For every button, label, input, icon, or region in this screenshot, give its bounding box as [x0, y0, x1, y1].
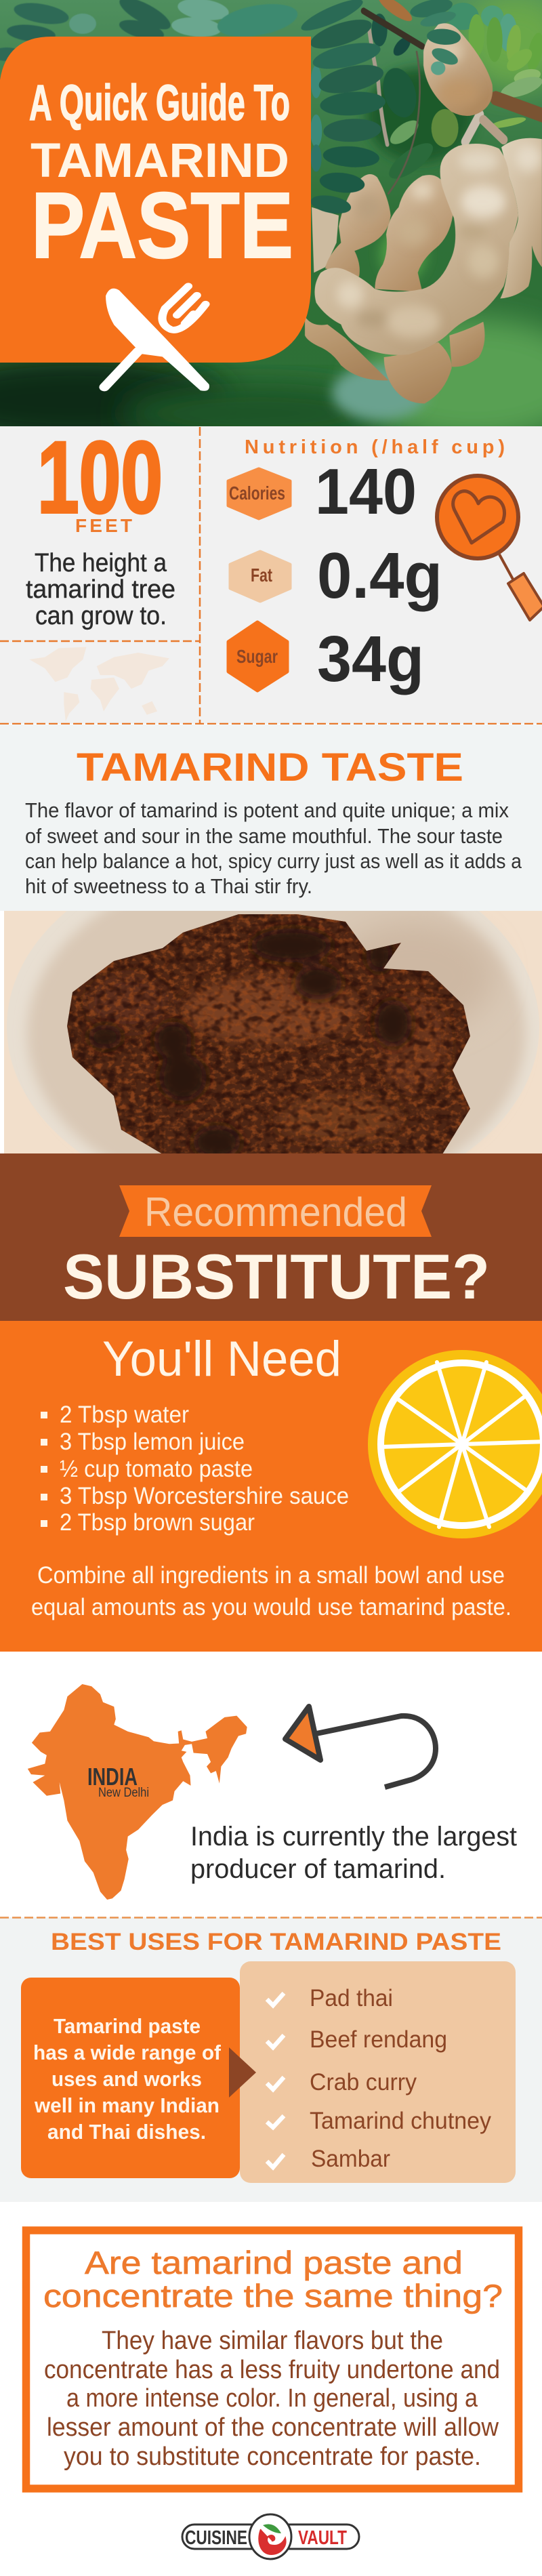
bright leaves — [371, 0, 542, 185]
heading: SUBSTITUTE? — [63, 1241, 490, 1312]
body text: you to substitute concentrate for paste. — [64, 2442, 481, 2471]
stat: 100 feet: FEET — [75, 515, 132, 536]
body text: They have similar flavors but the — [102, 2327, 443, 2355]
ingredient list: 2 Tbsp water — [60, 1402, 189, 1428]
description box: uses and works — [51, 2067, 202, 2091]
heading: BEST USES FOR TAMARIND PASTE — [51, 1929, 501, 1955]
description box: Tamarind paste — [54, 2014, 201, 2038]
stat: 100 feet: 100 — [37, 420, 163, 534]
heading: You'll Need — [102, 1332, 341, 1387]
stat: calories: Calories — [229, 483, 285, 504]
title line 2: TAMARIND — [30, 134, 289, 188]
stat: fat: 0.4g — [317, 539, 442, 612]
icon: lemon slice — [368, 1350, 542, 1538]
panel: stats background — [0, 426, 542, 724]
body text: concentrate has a less fruity undertone and — [44, 2356, 500, 2384]
heading: concentrate the same thing? — [43, 2278, 503, 2314]
heading — [43, 2245, 503, 2314]
ingredient list: 3 Tbsp Worcestershire sauce — [60, 1483, 349, 1509]
description box — [21, 1978, 240, 2178]
text: tree height: can grow to. — [35, 602, 167, 630]
photo: bowl of tamarind paste — [4, 911, 542, 1153]
instructions: equal amounts as you would use tamarind paste. — [31, 1594, 512, 1620]
list items: Crab curry — [310, 2069, 417, 2095]
arrow — [285, 1706, 436, 1787]
ingredient list: 2 Tbsp brown sugar — [60, 1509, 255, 1536]
ribbon — [119, 1185, 432, 1237]
text: tree height: The height a — [35, 549, 167, 577]
ingredient list: ½ cup tomato paste — [60, 1456, 253, 1482]
panel: best uses — [0, 1917, 542, 2202]
top-left leaflets — [0, 0, 300, 61]
body text — [44, 2327, 500, 2471]
body text: a more intense color. In general, using a — [66, 2384, 478, 2413]
hero photo: tamarind tree with pods — [0, 0, 542, 444]
right side: branches, pods and leaves — [299, 0, 542, 403]
panel: substitute header — [0, 1153, 542, 1321]
pod shading — [337, 41, 542, 338]
text: largest producer: producer of tamarind. — [190, 1854, 446, 1884]
heading: nutrition: Nutrition (/half cup) — [245, 436, 505, 458]
heading: Are tamarind paste and — [85, 2245, 463, 2281]
map: India: New Delhi — [98, 1786, 149, 1800]
ingredient list — [41, 1402, 349, 1536]
list items: Tamarind chutney — [310, 2108, 491, 2134]
description box: has a wide range of — [33, 2041, 222, 2064]
callout: paste vs concentrate — [26, 2230, 519, 2489]
list items: Pad thai — [310, 1985, 393, 2011]
icon: checks — [267, 1993, 284, 2167]
list box — [240, 1961, 516, 2183]
heading: TAMARIND TASTE — [77, 745, 463, 790]
list items: Beef rendang — [310, 2026, 447, 2053]
text: largest producer: India is currently the largest — [190, 1822, 517, 1852]
text: tree height: tamarind tree — [26, 575, 175, 604]
front leaflets — [299, 0, 461, 216]
stat: sugar: 34g — [317, 623, 424, 695]
world map — [29, 647, 169, 722]
title line 1: A Quick Guide To — [29, 75, 290, 131]
logo: Cuisine Vault: CUISINE — [185, 2527, 247, 2549]
panel: tamarind taste — [0, 724, 542, 911]
map: India — [28, 1684, 247, 1900]
main pod — [314, 144, 518, 355]
list items: Sambar — [311, 2146, 390, 2172]
stat: sugar — [228, 622, 424, 695]
stat: calories — [228, 455, 417, 528]
paragraph: of sweet and sour in the same mouthful. The sour taste — [25, 824, 503, 848]
ingredient list: 3 Tbsp lemon juice — [60, 1429, 245, 1455]
description box: well in many Indian — [34, 2093, 220, 2117]
logo: Cuisine Vault: VAULT — [298, 2527, 347, 2549]
icon: magnifier with heart — [437, 476, 542, 620]
icon: knife and fork — [104, 286, 209, 391]
paragraph: The flavor of tamarind is potent and quite unique; a mix — [25, 798, 509, 822]
paragraph: hit of sweetness to a Thai stir fry. — [25, 874, 312, 898]
text: tree height — [26, 549, 175, 630]
title panel — [0, 37, 311, 363]
logo: Cuisine Vault — [182, 2514, 359, 2559]
description box: and Thai dishes. — [47, 2120, 206, 2144]
instructions: Combine all ingredients in a small bowl and use — [37, 1562, 505, 1589]
panel: you'll need — [0, 1321, 542, 1652]
list items — [310, 1985, 491, 2172]
text: largest producer — [190, 1822, 517, 1884]
stat: calories: 140 — [315, 455, 417, 528]
stat: sugar: Sugar — [236, 646, 278, 667]
paragraph — [25, 798, 522, 898]
dividers — [0, 427, 542, 724]
back pods — [305, 23, 542, 403]
title line 3: PASTE — [31, 173, 293, 278]
map: India: INDIA — [87, 1763, 138, 1791]
stat: fat: Fat — [251, 565, 272, 586]
arrow: connector — [229, 2047, 256, 2098]
branches — [364, 11, 542, 194]
stat: fat — [230, 539, 442, 612]
ribbon text: Recommended — [144, 1189, 407, 1235]
body text: lesser amount of the concentrate will allow — [47, 2413, 499, 2442]
instructions — [31, 1562, 512, 1620]
